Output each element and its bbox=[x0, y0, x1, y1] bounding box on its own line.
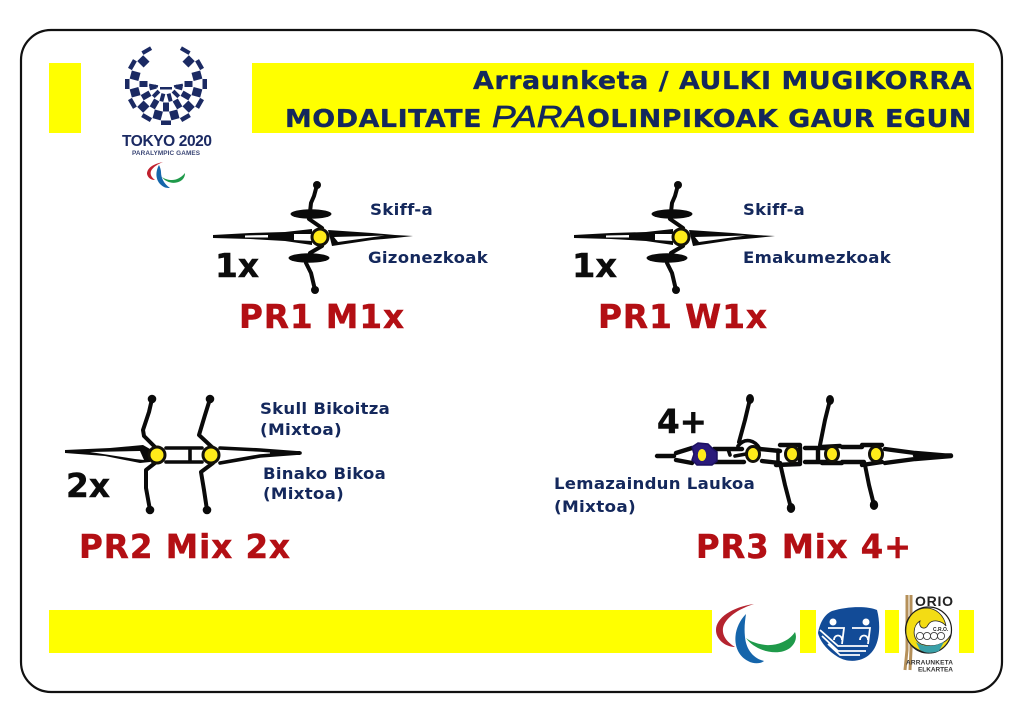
hull bbox=[574, 229, 775, 246]
hull bbox=[213, 229, 413, 246]
seat bbox=[673, 229, 689, 245]
title line 2: MODALITATE bbox=[285, 104, 482, 133]
boat diagram: PR1 W1x bbox=[574, 181, 775, 294]
seat bbox=[312, 229, 328, 245]
label: Mixtoa upper: (Mixtoa) bbox=[260, 420, 342, 439]
upper oar bbox=[670, 185, 683, 228]
small agitos bbox=[147, 162, 185, 188]
label: Mixtoa coxed four: (Mixtoa) bbox=[554, 497, 636, 516]
label: Skiff-a men: Skiff-a bbox=[370, 200, 433, 219]
boat code 2x: 2x bbox=[66, 466, 110, 505]
left yellow banner block bbox=[49, 63, 81, 133]
boat code 4+: 4+ bbox=[657, 402, 707, 441]
rowers' seats bbox=[746, 446, 760, 462]
crest initials: C.R.O. bbox=[933, 627, 949, 633]
boat diagram: PR3 Mix 4+ bbox=[657, 394, 951, 513]
upper oar bbox=[309, 185, 322, 228]
label: Skiff-a women: Skiff-a bbox=[743, 200, 805, 219]
boat diagram: PR1 M1x bbox=[213, 181, 413, 294]
coxswain bbox=[692, 443, 717, 465]
Tokyo 2020 Paralympic logo bbox=[122, 46, 212, 188]
rings bbox=[916, 632, 945, 640]
icon: Orio C.R.O. club crest bbox=[905, 593, 953, 674]
footer yellow bars bbox=[49, 610, 974, 653]
club name: ORIO bbox=[915, 593, 953, 609]
heading: PR2 Mix 2x: PR2 Mix 2x bbox=[79, 527, 291, 566]
seats bbox=[149, 447, 165, 463]
oars of first rower bbox=[143, 399, 155, 510]
title line 1: Arraunketa / AULKI MUGIKORRA bbox=[473, 66, 972, 95]
oars of second rower bbox=[199, 399, 214, 510]
title line 2: PARA bbox=[492, 99, 586, 134]
hull bbox=[657, 445, 951, 465]
heading: PR3 Mix 4+: PR3 Mix 4+ bbox=[696, 527, 912, 566]
logo subtitle: PARALYMPIC GAMES bbox=[132, 150, 201, 157]
label: Binako Bikoa: Binako Bikoa bbox=[263, 464, 386, 483]
label: Emakumezkoak: Emakumezkoak bbox=[743, 248, 891, 267]
crossed oars bbox=[905, 595, 911, 670]
hull bbox=[65, 445, 300, 463]
heading: PR1 W1x: PR1 W1x bbox=[598, 297, 768, 336]
lower oar bbox=[288, 253, 330, 263]
logo wordmark: TOKYO 2020 bbox=[122, 133, 212, 150]
label: Skull Bikoitza: Skull Bikoitza bbox=[260, 399, 390, 418]
boat code 1x women: 1x bbox=[572, 246, 617, 285]
title banner bbox=[252, 63, 974, 134]
label: Gizonezkoak: Gizonezkoak bbox=[368, 248, 488, 267]
boat code 1x men: 1x bbox=[215, 246, 259, 285]
oars bbox=[739, 399, 874, 508]
label: Mixtoa lower: (Mixtoa) bbox=[263, 484, 344, 503]
icon: Paralympic agitos bbox=[716, 604, 796, 663]
lower oar bbox=[646, 253, 688, 263]
title line 2 bbox=[285, 99, 972, 134]
boat diagram: PR2 Mix 2x bbox=[65, 395, 300, 514]
crest circle bbox=[906, 607, 952, 653]
icon: rowing pictogram bbox=[818, 607, 879, 661]
club word 1: ARRAUNKETA bbox=[906, 660, 953, 666]
title line 2: OLINPIKOAK GAUR EGUN bbox=[587, 104, 972, 133]
club word 2: ELKARTEA bbox=[918, 666, 953, 674]
heading: PR1 M1x: PR1 M1x bbox=[239, 297, 405, 336]
checkered emblem bbox=[125, 46, 207, 125]
label: Lemazaindun Laukoa: Lemazaindun Laukoa bbox=[554, 474, 755, 493]
